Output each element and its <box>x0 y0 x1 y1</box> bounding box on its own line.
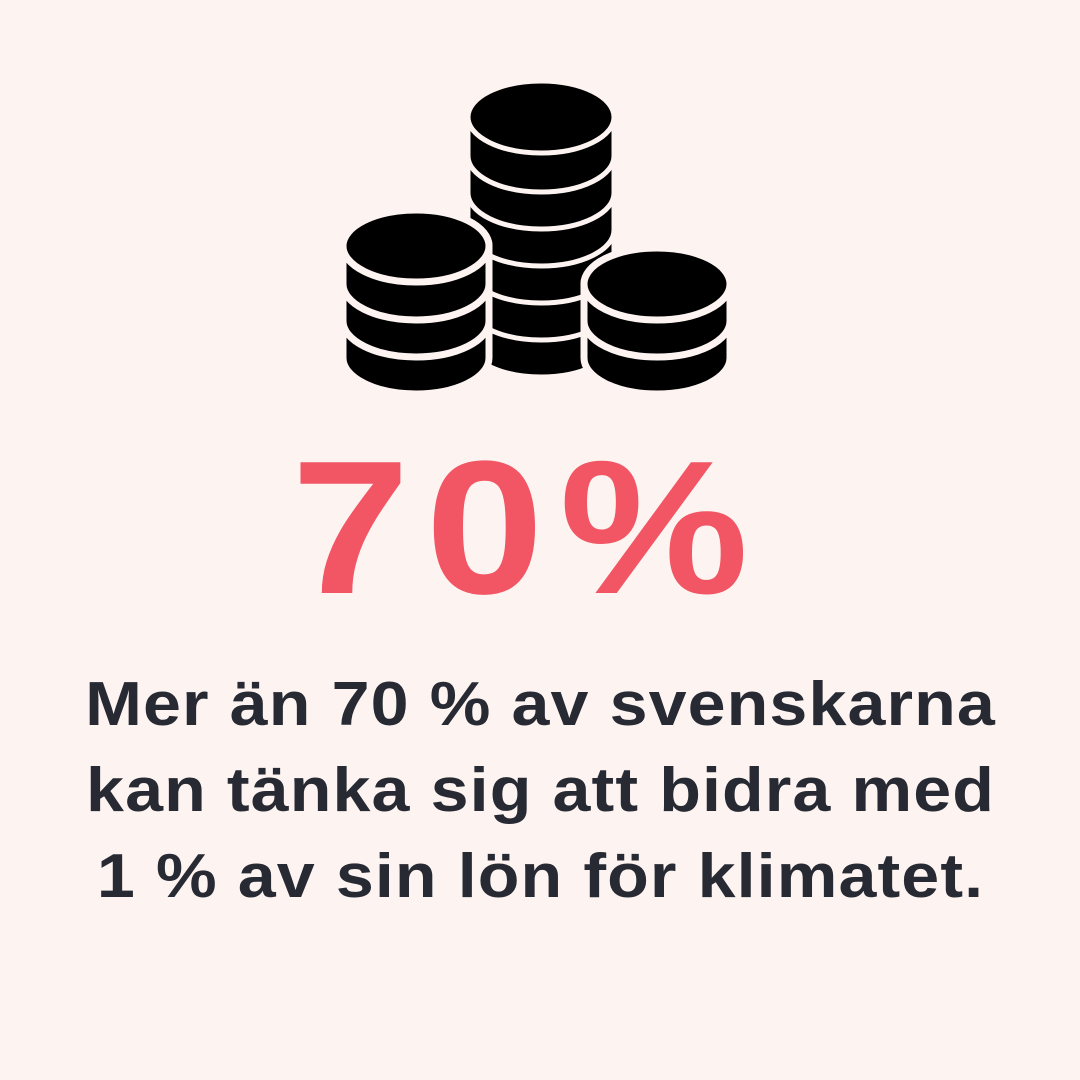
icon: coin stacks <box>346 84 726 390</box>
middle stack <box>468 81 614 377</box>
statement text: Mer än 70 % av svenskarna <box>85 670 996 739</box>
statement text: kan tänka sig att bidra med <box>86 756 995 825</box>
statement text: 1 % av sin lön för klimatet. <box>97 842 984 911</box>
big number: 70% <box>291 422 764 634</box>
statement text <box>85 670 996 911</box>
right stack <box>584 248 730 394</box>
left stack <box>343 210 489 394</box>
